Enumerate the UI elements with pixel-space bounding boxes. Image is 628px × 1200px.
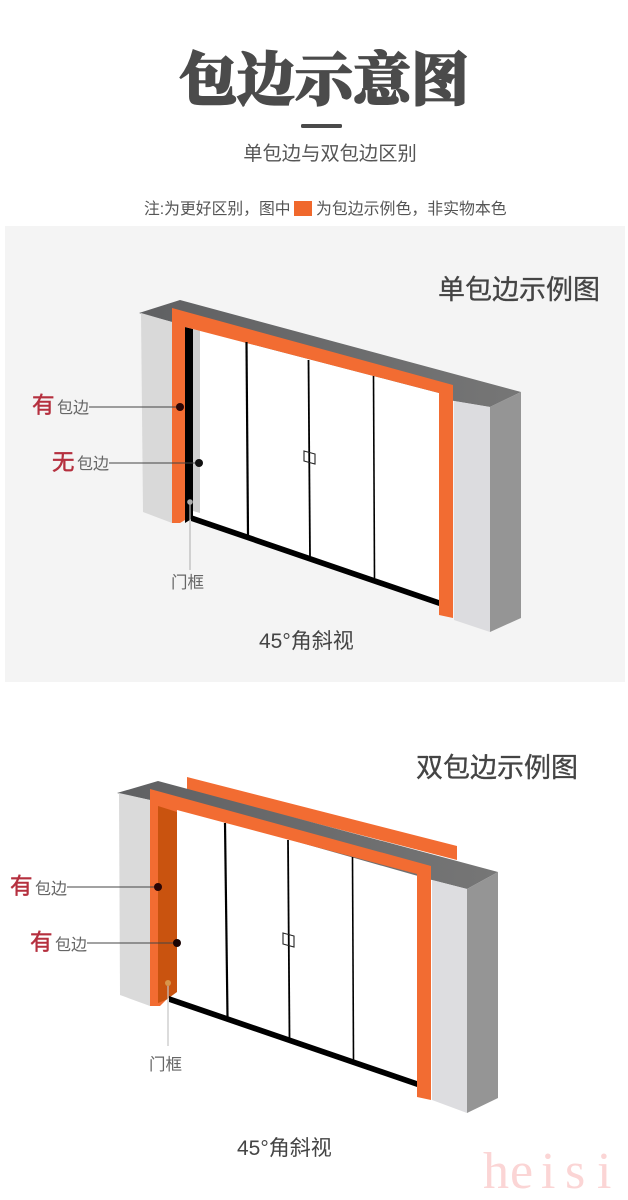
- black door frame: [185, 327, 193, 523]
- title underline: [301, 124, 342, 128]
- wall top cap: [117, 781, 498, 889]
- watermark: heisi: [483, 1143, 611, 1200]
- callout: front wrap: [10, 874, 162, 899]
- diagram: double wrap door: [117, 777, 498, 1113]
- caption: viewing angle: 45°角斜视: [259, 630, 354, 653]
- callout: front wrap: 有: [10, 874, 33, 899]
- panel: double wrap example: [10, 753, 578, 1160]
- note with colour swatch: [144, 200, 507, 218]
- back orange wrap: [187, 777, 457, 860]
- left wall: [119, 793, 150, 1006]
- callout: inner wrap: [30, 930, 181, 955]
- callout: door frame: [171, 499, 204, 592]
- callout: door frame: [149, 980, 182, 1074]
- glass doors: [193, 329, 439, 603]
- door dividers: [225, 823, 354, 1060]
- heading: double wrap: 双包边示例图: [416, 753, 578, 783]
- title: 包边示意图: [179, 33, 469, 117]
- callout: front wrap: 包边: [35, 880, 67, 898]
- door dividers: [246, 342, 374, 578]
- bottom rail: [191, 515, 439, 606]
- right wall side: [490, 392, 521, 632]
- heading: single wrap: 单包边示例图: [438, 275, 600, 305]
- panel: single wrap example: [5, 226, 625, 682]
- right wall side: [467, 872, 498, 1113]
- wall top cap: [139, 300, 521, 407]
- callout: inner wrap: 包边: [55, 936, 87, 954]
- callout: wrapped side: 包边: [57, 399, 89, 417]
- orange wrap: [150, 789, 431, 1100]
- note with colour swatch: 为包边示例色，非实物本色: [316, 200, 507, 218]
- orange wrap: [172, 308, 453, 618]
- swatch: orange: [294, 201, 312, 216]
- door handle: [283, 933, 294, 947]
- caption: viewing angle: 45°角斜视: [237, 1137, 332, 1160]
- note with colour swatch: 注:为更好区别，图中: [144, 200, 291, 218]
- diagram: single wrap door: [139, 300, 521, 632]
- left wall: [141, 313, 172, 523]
- callout: wrapped side: [32, 393, 184, 418]
- subtitle: 单包边与双包边区别: [243, 143, 417, 165]
- inner wall shade: [193, 329, 200, 513]
- door handle: [304, 451, 315, 464]
- dark orange reveal: [158, 805, 177, 1004]
- callout: inner wrap: 有: [30, 930, 53, 955]
- callout: door frame: 门框: [149, 1055, 182, 1074]
- callout: unwrapped side: [52, 450, 203, 475]
- right wall front: [454, 401, 490, 632]
- callout: unwrapped side: 无: [52, 450, 75, 475]
- bottom rail: [169, 996, 417, 1087]
- right wall front: [432, 880, 467, 1113]
- callout: wrapped side: 有: [32, 393, 55, 418]
- panel background: [5, 226, 625, 682]
- callout: door frame: 门框: [171, 573, 204, 592]
- callout: unwrapped side: 包边: [77, 455, 109, 473]
